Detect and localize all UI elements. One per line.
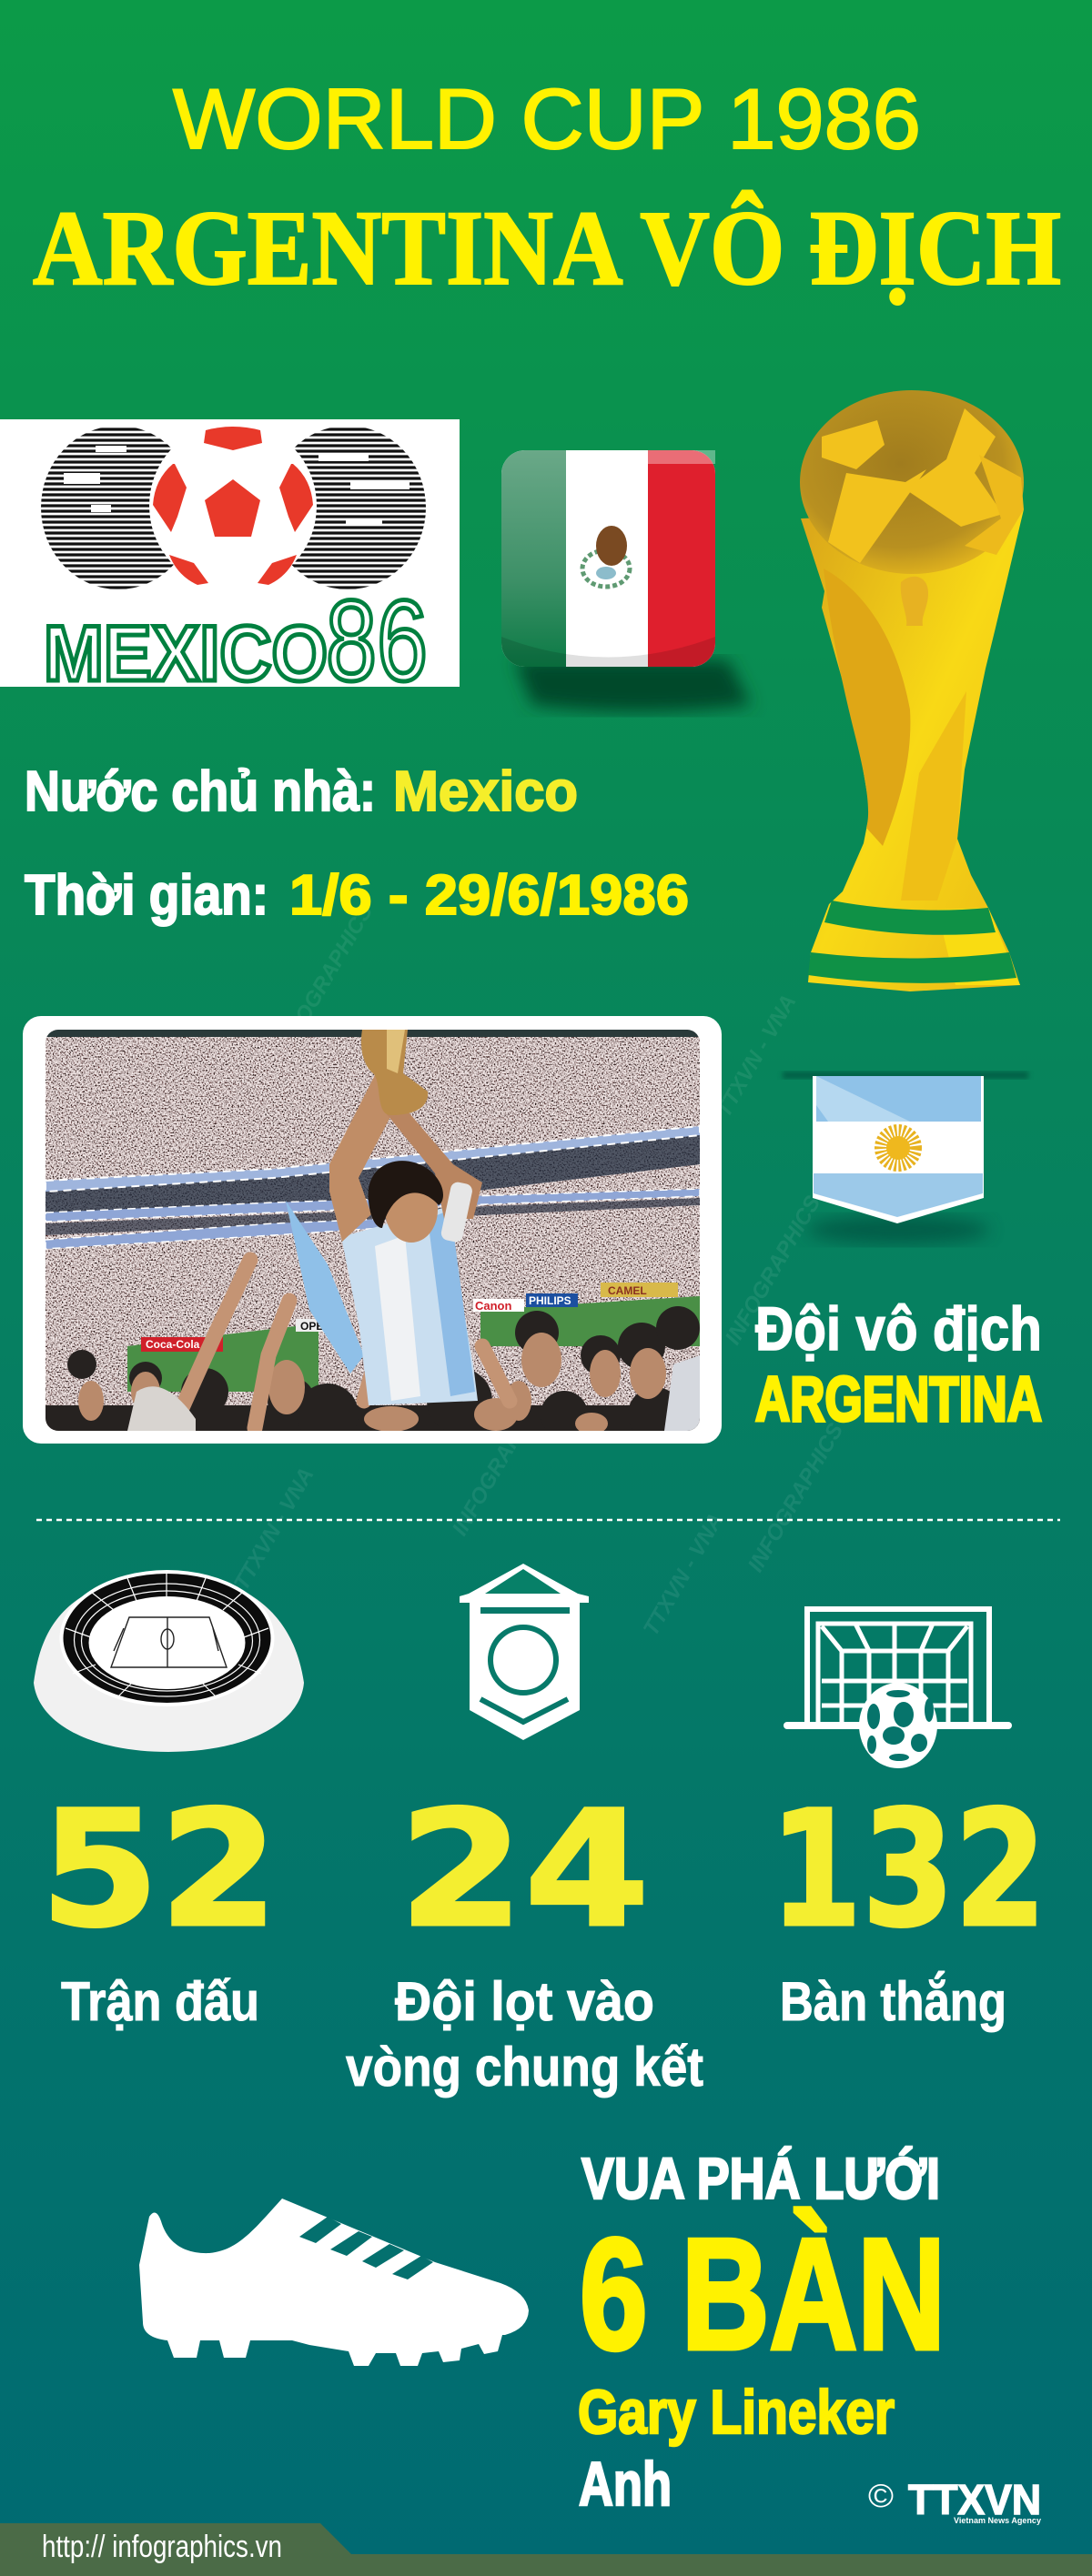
stadium pitch [111,1617,227,1667]
trophy [800,390,1024,991]
stat: 52 matches [40,1776,278,2032]
top scorer text: 6 BÀN [580,2205,945,2382]
icon: red football [149,422,317,589]
dates text [25,864,689,927]
TTXVN logo: TTXVN [908,2476,1041,2523]
goal ball [859,1683,937,1768]
Mexico flag icon [501,450,751,711]
watermarks: INFOGRAPHICS [273,901,378,1058]
pitch and advertising boards: PHILIPS [529,1294,571,1307]
Argentina flag pennant [783,1072,1028,1244]
stat: 132 goals: Bàn thắng [780,1971,1006,2032]
top scorer text: VUA PHÁ LƯỚI [581,2146,940,2211]
stat: 52 matches: 52 [40,1776,278,1963]
stat: 24 teams: 24 [399,1776,650,1963]
TTXVN logo: © [868,2477,894,2514]
pitch and advertising boards: Coca-Cola [146,1338,200,1351]
Mexico86 wordmark: 86 [326,577,428,705]
stat: 24 teams: vòng chung kết [346,2037,703,2098]
stat: 24 teams: Đội lọt vào [395,1971,654,2032]
title: WORLD CUP 1986 [173,71,921,166]
logo: Mexico 86 [0,419,460,705]
top scorer text: Gary Lineker [578,2378,895,2447]
photo panel: Maradona lifting the trophy [23,1016,722,1445]
host country text: Mexico [393,760,578,823]
icon: goal and ball [787,1609,1008,1768]
stat: 52 matches: Trận đấu [61,1971,259,2032]
watermarks: TTXVN - VNA [639,1509,729,1640]
crowd [46,1030,700,1431]
TTXVN logo: Vietnam News Agency [954,2516,1041,2525]
champion label: Đội vô địch [755,1294,1042,1363]
stat: 132 goals [770,1776,1046,2032]
title [33,71,1061,307]
trophy globe [800,390,1024,574]
host country text: Nước chủ nhà: [25,760,376,823]
champion label [755,1294,1042,1434]
footer band [0,2523,1092,2576]
pitch and advertising boards: Canon [475,1299,511,1313]
stat: 24 teams [346,1776,703,2098]
footer band: http:// infographics.vn [42,2530,282,2564]
watermarks: INFOGRAPHICS [743,1419,848,1576]
dates text: 1/6 - 29/6/1986 [289,864,689,927]
trophy shading [824,569,1020,985]
icon: sun of May [881,1131,915,1165]
pitch and advertising boards: OPE [300,1320,323,1333]
icon: striped world globes [27,429,437,588]
foreground people [46,1260,700,1445]
top scorer text [578,2146,945,2519]
icon: stadium [34,1570,304,1752]
watermarks: INFOGRAPHICS [721,1192,825,1349]
Mexico86 wordmark [44,577,428,705]
trophy in photo [361,1030,428,1115]
watermarks: INFOGRAPHICS [448,1383,552,1540]
flag emblem [582,526,630,587]
pitch and advertising boards [127,1283,700,1392]
watermarks: TTXVN - VNA [229,1464,319,1595]
pitch and advertising boards: CAMEL [608,1284,647,1297]
Mexico86 wordmark: MEXICO [44,610,328,698]
icon: pennant [460,1564,589,1740]
top scorer text: Anh [579,2450,672,2519]
trophy base stripes [808,901,1016,983]
stadium tiers [46,1126,700,1249]
watermarks: TTXVN - VNA [712,991,802,1122]
icon: football boot [139,2199,529,2366]
dates text: Thời gian: [25,864,268,927]
watermarks [229,901,848,1640]
Maradona figure [286,1072,482,1405]
